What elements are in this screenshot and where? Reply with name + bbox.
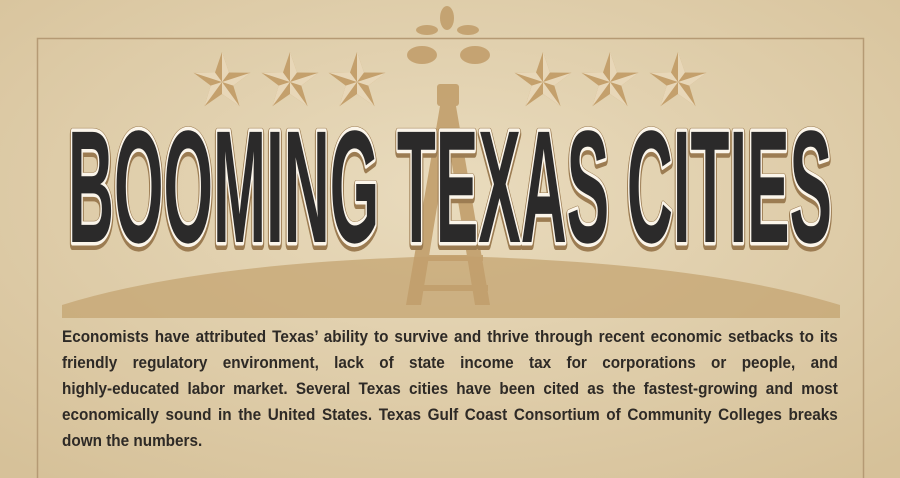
- ground mound: [62, 256, 840, 318]
- intro paragraph: friendly regulatory environment, lack of state income tax for corporations or people, and: [62, 353, 838, 372]
- intro paragraph: [62, 327, 838, 450]
- stars: left group: [194, 52, 386, 106]
- intro paragraph: highly-educated labor market. Several Texas cities have been cited as the fastest-growing and most: [62, 379, 838, 398]
- intro paragraph: down the numbers.: [62, 431, 202, 450]
- stars: right group: [514, 52, 706, 106]
- icon: oil derrick: [406, 6, 490, 305]
- intro paragraph: economically sound in the United States. Texas Gulf Coast Consortium of Community Colleges breaks: [62, 405, 838, 424]
- intro paragraph: Economists have attributed Texas’ ability to survive and thrive through recent economic setbacks to its: [62, 327, 838, 346]
